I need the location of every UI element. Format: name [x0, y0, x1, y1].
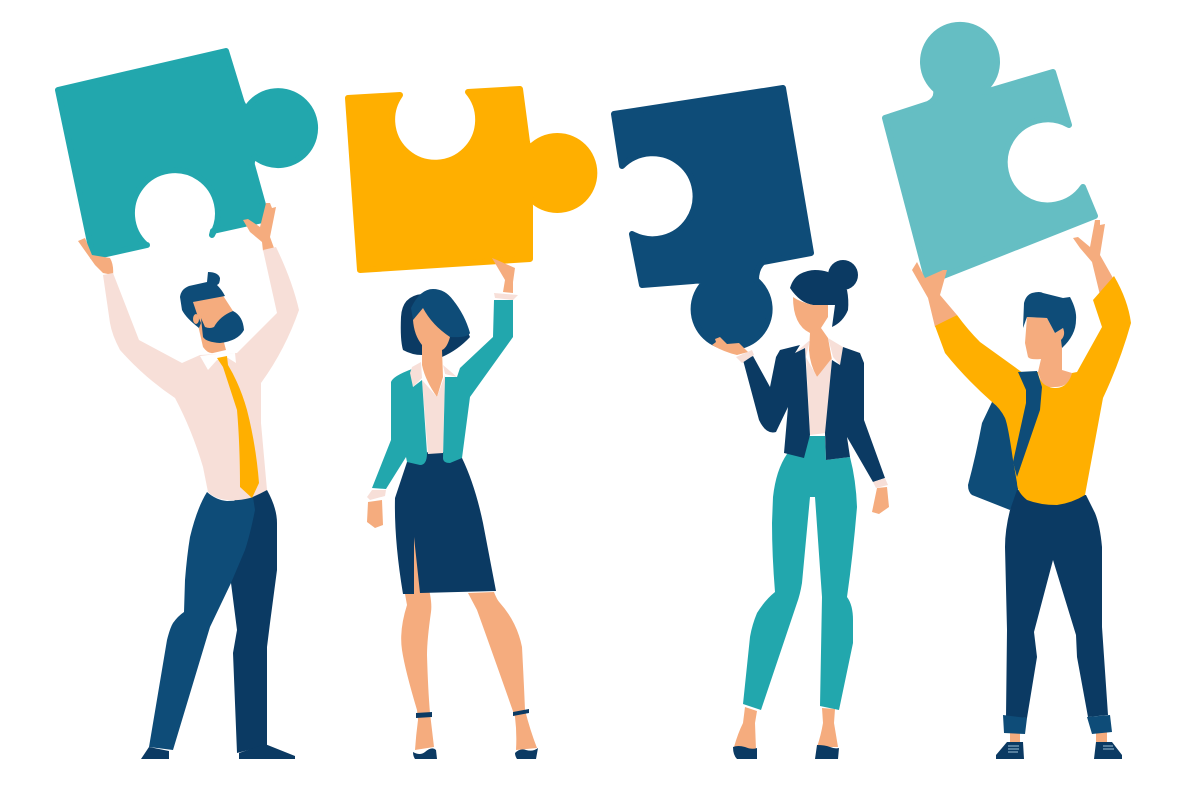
backpack strap: [1013, 371, 1042, 477]
collar and cuffs: [367, 293, 518, 500]
backpack: [968, 400, 1020, 510]
hair: [180, 272, 225, 328]
shoe laces: [1008, 746, 1114, 752]
puzzle piece: navy: [614, 88, 811, 347]
neck: [198, 325, 226, 353]
blouse: [806, 357, 832, 435]
jacket: [743, 345, 885, 482]
person 3: woman with bun and teal trousers: [712, 260, 889, 759]
bun: [828, 260, 858, 290]
hair: [1023, 292, 1076, 348]
hands and forearms: [912, 220, 1113, 327]
person 4: man with yellow sweater and backpack: [912, 220, 1131, 759]
shoes: [413, 748, 538, 759]
feet: [734, 707, 838, 750]
neck and face: [1025, 317, 1072, 387]
tie: [217, 356, 259, 498]
ankle straps: [416, 709, 529, 718]
collar: [795, 338, 843, 365]
collar: [200, 353, 236, 370]
cuffs: [736, 350, 888, 488]
face: [193, 294, 242, 340]
ear: [193, 314, 199, 324]
hands: [712, 337, 889, 514]
hair front: [411, 289, 470, 337]
pants back leg: [215, 490, 277, 753]
sweater: [935, 276, 1131, 505]
trouser cuffs: [1003, 715, 1112, 734]
blouse: [422, 375, 445, 454]
puzzle piece: yellow: [348, 89, 594, 270]
beard: [201, 311, 244, 343]
ankles: [1010, 730, 1107, 744]
shirt: [103, 247, 299, 500]
shoes: [141, 744, 295, 759]
shoes: [733, 745, 839, 759]
puzzle piece: teal: [58, 51, 315, 257]
face and neck: [413, 308, 450, 397]
person 1: bearded man with tie: [78, 203, 299, 759]
hair back: [401, 294, 470, 357]
shoes: [996, 742, 1122, 759]
legs: [401, 535, 537, 750]
puzzle piece: light teal: [885, 25, 1095, 282]
hands: [78, 203, 276, 275]
trousers: [743, 436, 857, 710]
pants front leg: [149, 492, 255, 750]
hands: [367, 258, 515, 528]
face and neck: [793, 297, 832, 377]
hair: [790, 270, 848, 327]
skirt: [395, 452, 496, 594]
trousers: [1005, 490, 1108, 718]
person 2: woman with teal jacket and skirt: [367, 258, 538, 759]
jacket: [372, 300, 513, 489]
